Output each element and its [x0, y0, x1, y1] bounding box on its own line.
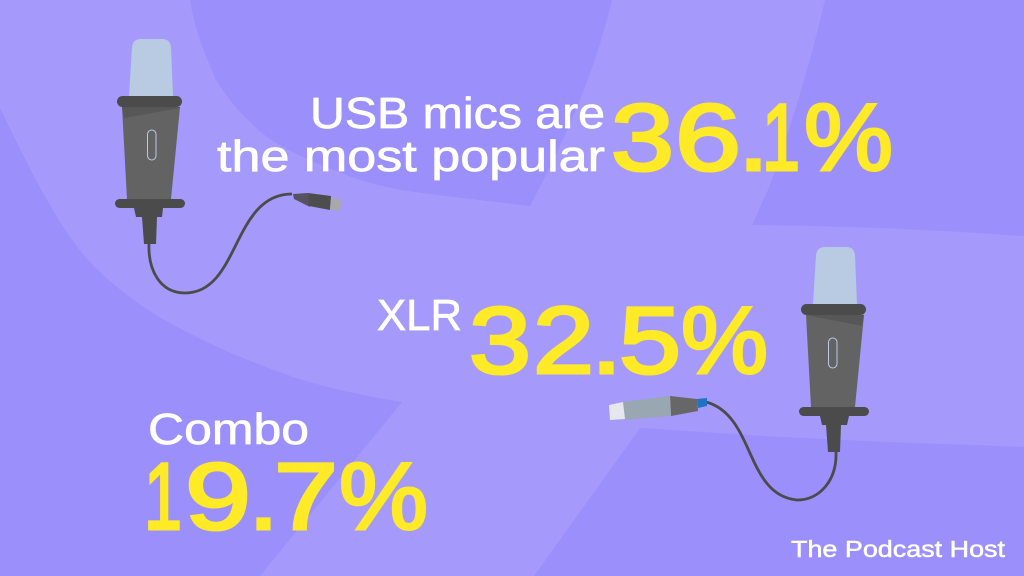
stat: 36.1%: .: [738, 85, 769, 191]
icon: XLR microphone: [609, 247, 869, 500]
stat: 32.5%: 5: [619, 288, 681, 394]
stat: 32.5%: 2: [533, 288, 594, 394]
logo: The Podcast Host: The Podcast Host: [791, 536, 1006, 562]
stat: 36.1%: %: [804, 85, 893, 191]
stat: 32.5%: .: [591, 288, 622, 394]
stat: 32.5%: 3: [469, 288, 531, 394]
stat: 19.7%: 7: [274, 444, 338, 550]
stat: 19.7%: %: [339, 444, 428, 550]
icon: USB microphone: [115, 39, 341, 293]
stat: 36.1%: 3: [611, 85, 674, 191]
stat: 19.7%: .: [248, 444, 279, 550]
stat: 19.7%: 9: [185, 444, 251, 550]
text: XLR label: XLR: [377, 291, 462, 340]
text: USB mics label: USB mics are: [310, 89, 605, 138]
stat: 36.1%: 1: [762, 85, 800, 191]
stat: 32.5%: %: [681, 288, 768, 394]
text: Combo label: Combo: [148, 405, 309, 454]
stat: 19.7%: 1: [144, 444, 182, 550]
text: USB mics label line 2: the most popular: [217, 132, 605, 181]
stat: 36.1%: 6: [675, 85, 741, 191]
